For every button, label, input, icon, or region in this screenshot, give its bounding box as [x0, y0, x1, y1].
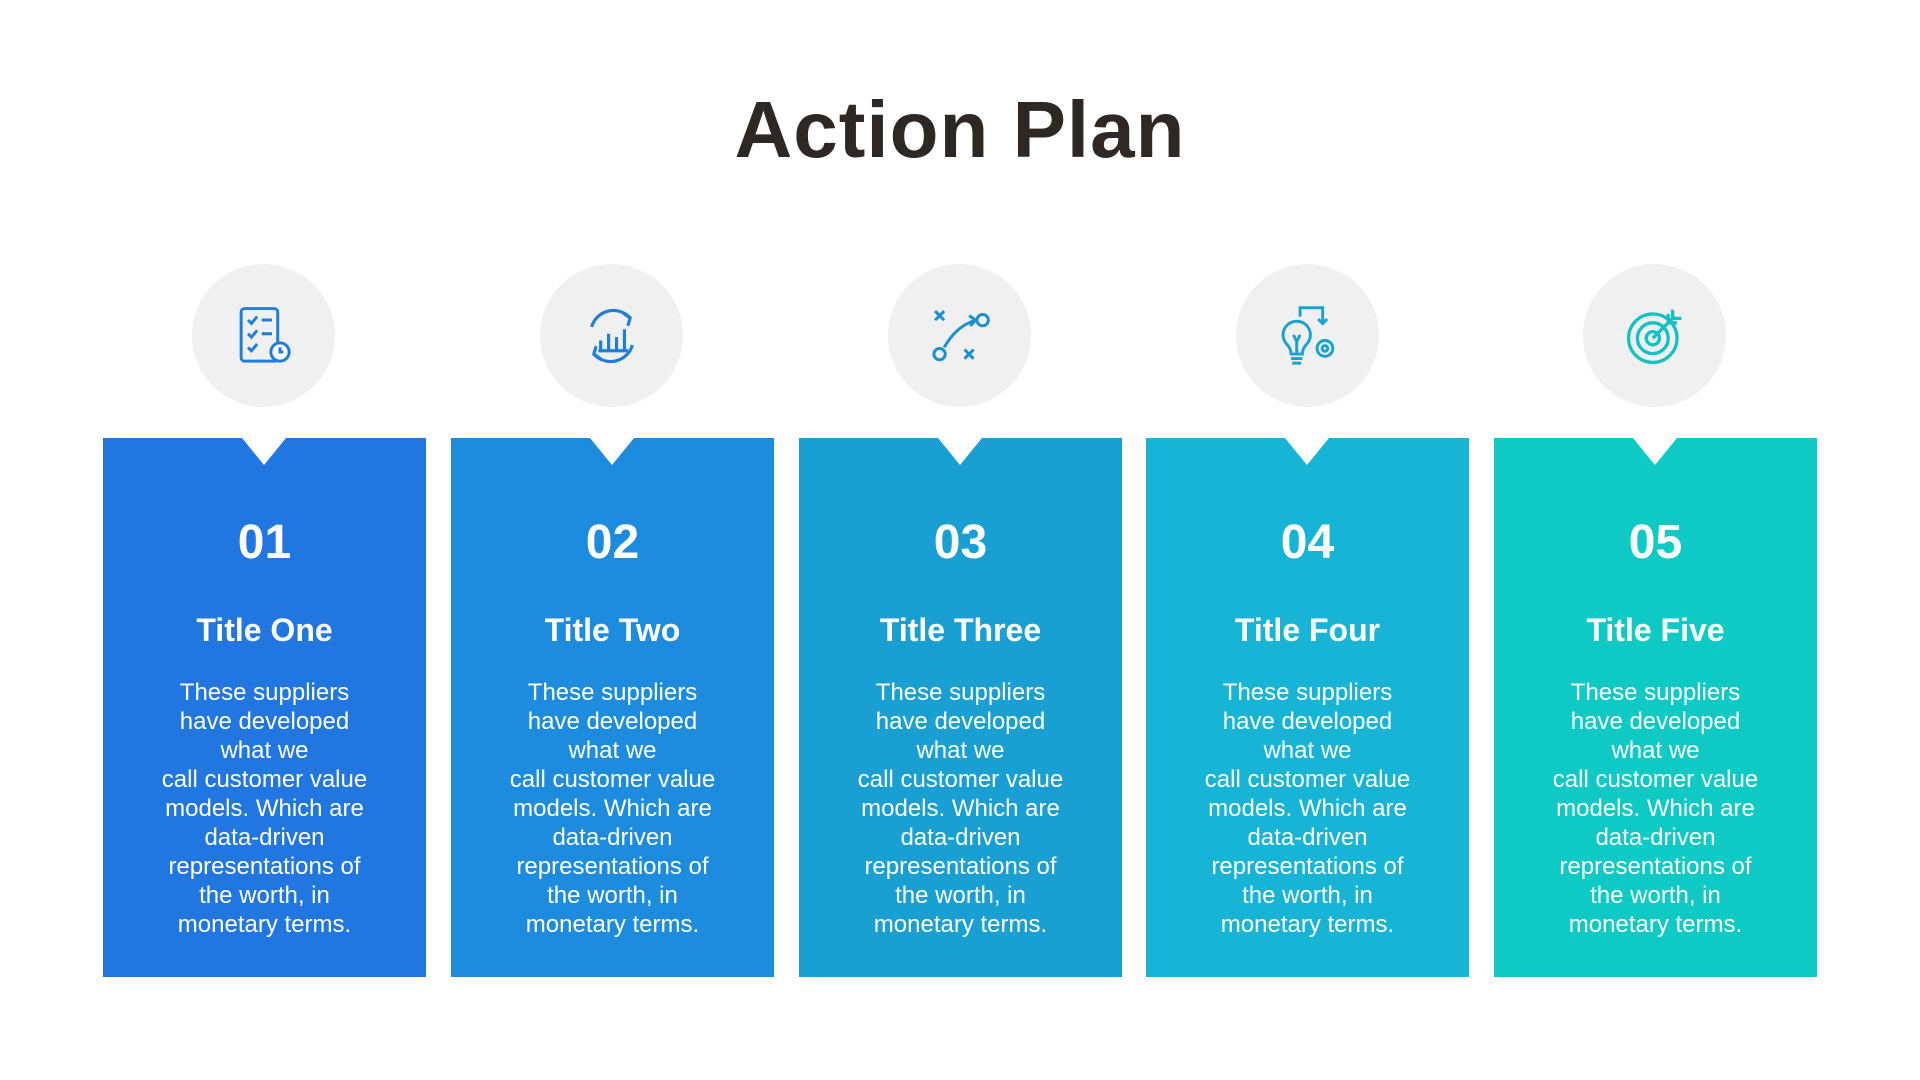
panel 1: 01: [238, 516, 291, 569]
panel 3: [799, 438, 1122, 977]
panel 1: models. Which are: [165, 795, 364, 822]
icon circle 1: checklist: [192, 264, 335, 407]
panel 2: have developed: [528, 708, 697, 735]
panel 2: data-driven: [552, 824, 673, 851]
panel 3: call customer value: [858, 766, 1063, 793]
panel 3: have developed: [876, 708, 1045, 735]
panel 4: what we: [1263, 737, 1352, 764]
panel 4: These suppliers: [1223, 679, 1392, 706]
panel 5: monetary terms.: [1569, 911, 1742, 938]
panel 1: representations of: [168, 853, 361, 880]
panel 3: monetary terms.: [874, 911, 1047, 938]
panel 1: data-driven: [204, 824, 325, 851]
panel 2: 02: [586, 516, 639, 569]
panel 5: These suppliers: [1571, 679, 1740, 706]
panel 5: call customer value: [1553, 766, 1758, 793]
panel 2: monetary terms.: [526, 911, 699, 938]
panel 2: the worth, in: [547, 882, 678, 909]
panel 5: data-driven: [1595, 824, 1716, 851]
panel 1: what we: [220, 737, 309, 764]
panel 5: what we: [1611, 737, 1700, 764]
panel 2: representations of: [516, 853, 709, 880]
panel 5: [1494, 438, 1817, 977]
panel 2: [451, 438, 774, 977]
panel 1: Title One: [196, 612, 333, 648]
panel 4: the worth, in: [1242, 882, 1373, 909]
panel 3: These suppliers: [876, 679, 1045, 706]
panel 5: representations of: [1559, 853, 1752, 880]
panel 2: These suppliers: [528, 679, 697, 706]
panel 4: Title Four: [1235, 612, 1380, 648]
panel 1: have developed: [180, 708, 349, 735]
panel 5: Title Five: [1586, 612, 1725, 648]
panel 4: models. Which are: [1208, 795, 1407, 822]
title: Action Plan: [734, 85, 1186, 174]
panel 5: models. Which are: [1556, 795, 1755, 822]
panel 1: These suppliers: [180, 679, 349, 706]
panel 4: representations of: [1211, 853, 1404, 880]
panel 3: 03: [934, 516, 987, 569]
panel 5: 05: [1629, 516, 1682, 569]
panel 3: data-driven: [900, 824, 1021, 851]
panel 2: what we: [568, 737, 657, 764]
panel 3: what we: [916, 737, 1005, 764]
panel 4: monetary terms.: [1221, 911, 1394, 938]
panel 2: models. Which are: [513, 795, 712, 822]
panel 1: monetary terms.: [178, 911, 351, 938]
panel 3: representations of: [864, 853, 1057, 880]
icon circle 5: target: [1583, 264, 1726, 407]
panel 1: [103, 438, 426, 977]
icon circle 2: cycle chart: [540, 264, 683, 407]
panel 1: call customer value: [162, 766, 367, 793]
panel 5: have developed: [1571, 708, 1740, 735]
icon circle 4: idea gear: [1236, 264, 1379, 407]
panel 4: 04: [1281, 516, 1334, 569]
panel 3: the worth, in: [895, 882, 1026, 909]
panel 4: [1146, 438, 1469, 977]
icon circle 3: strategy: [888, 264, 1031, 407]
panel 4: have developed: [1223, 708, 1392, 735]
panel 4: call customer value: [1205, 766, 1410, 793]
panel 2: Title Two: [545, 612, 680, 648]
panel 5: the worth, in: [1590, 882, 1721, 909]
panel 1: the worth, in: [199, 882, 330, 909]
panel 3: models. Which are: [861, 795, 1060, 822]
panel 4: data-driven: [1247, 824, 1368, 851]
panel 2: call customer value: [510, 766, 715, 793]
panel 3: Title Three: [880, 612, 1041, 648]
